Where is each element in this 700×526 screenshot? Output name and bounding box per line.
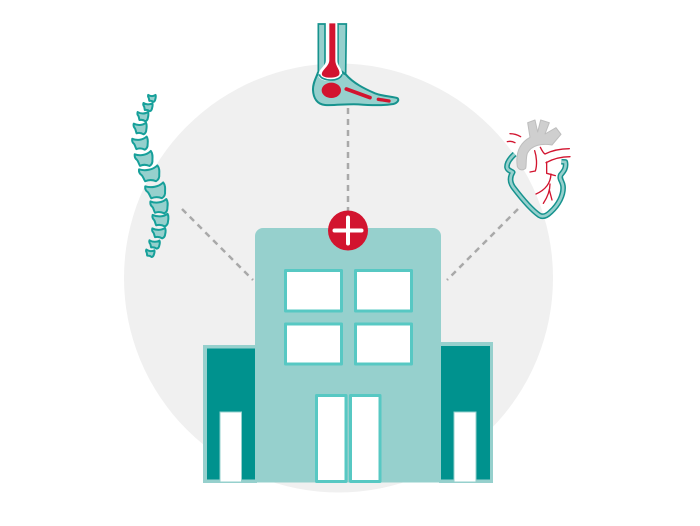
vessels (507, 134, 570, 203)
right wing (439, 342, 493, 483)
dashed connector: foot to hospital (347, 108, 349, 212)
tibia (319, 23, 342, 81)
foot body (313, 68, 398, 105)
double entrance doors (316, 396, 380, 482)
toe bone (378, 99, 389, 101)
left wing door (220, 412, 242, 482)
icon: spine (132, 94, 169, 257)
heel bone (322, 83, 341, 98)
icon: foot (313, 23, 398, 105)
aorta (517, 120, 561, 170)
background circle (124, 64, 553, 492)
red cross badge (328, 210, 368, 250)
hospital building (203, 210, 493, 483)
windows (286, 270, 412, 364)
metatarsal (346, 89, 370, 98)
dashed connector: spine to hospital (182, 209, 253, 280)
shin sides (318, 24, 346, 74)
icon: heart (507, 120, 570, 216)
dashed connector: heart to hospital (447, 209, 518, 280)
left wing (203, 345, 257, 483)
heart wall (507, 154, 566, 216)
right wing door (454, 412, 476, 482)
main block (255, 228, 441, 482)
